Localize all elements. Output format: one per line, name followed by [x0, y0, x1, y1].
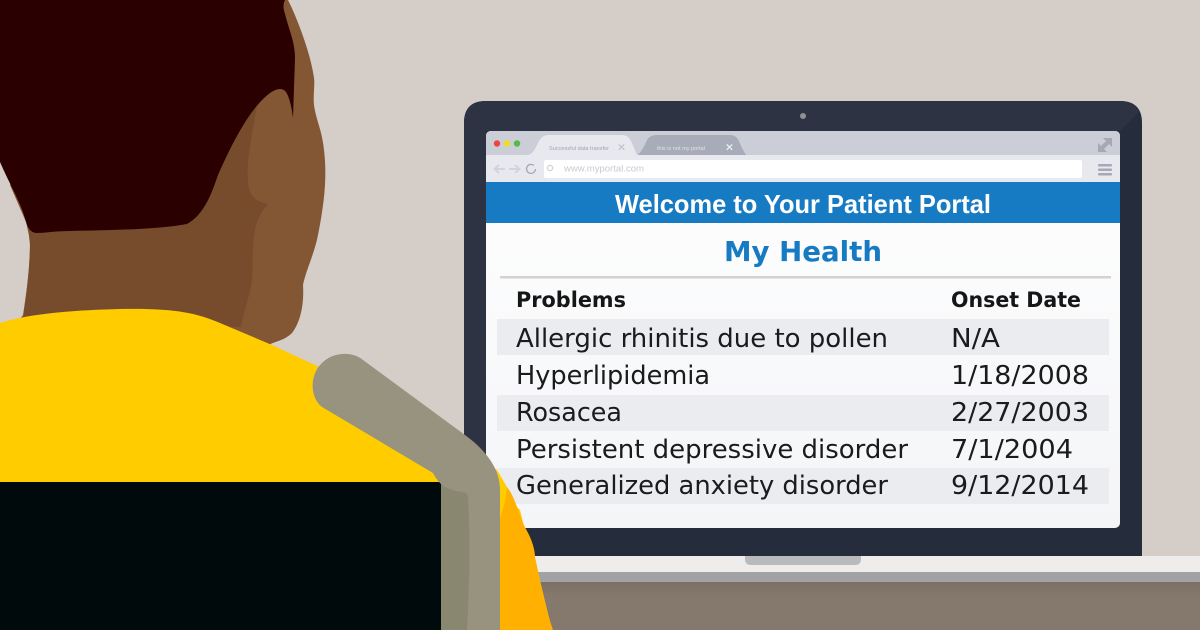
laptop base	[530, 556, 1200, 582]
portal banner	[486, 182, 1120, 223]
chair back	[0, 482, 441, 630]
inactive tab	[638, 135, 746, 155]
chair arm	[313, 354, 500, 630]
shirt	[0, 309, 553, 630]
desk	[530, 582, 1200, 630]
row text: Rosacea	[516, 398, 622, 428]
laptop	[464, 101, 1200, 582]
inactive tab: this is not my portal	[657, 146, 705, 152]
neck shadow	[23, 100, 268, 327]
row text: 7/1/2004	[951, 435, 1073, 465]
portal banner: Welcome to Your Patient Portal	[615, 189, 991, 219]
menu icon	[1098, 164, 1112, 176]
back, forward and reload icons	[494, 164, 536, 173]
row text: N/A	[951, 324, 1000, 354]
problems table	[497, 288, 1109, 504]
person	[0, 0, 553, 630]
window buttons	[494, 140, 520, 147]
screen	[486, 131, 1120, 528]
table header: Problems	[516, 288, 626, 312]
browser tab bar	[486, 131, 1120, 155]
inactive tab: ×	[725, 140, 734, 154]
row stripes	[497, 319, 1109, 504]
row text	[516, 324, 1089, 501]
row text: 9/12/2014	[951, 471, 1089, 501]
url bar: www.myportal.com	[563, 164, 644, 174]
row text: 2/27/2003	[951, 398, 1089, 428]
table header	[516, 288, 1081, 312]
head and neck	[0, 0, 325, 345]
row text: Allergic rhinitis due to pollen	[516, 324, 888, 354]
active tab	[528, 135, 637, 155]
row text: 1/18/2008	[951, 361, 1089, 391]
webcam	[800, 113, 806, 119]
expand icon	[1098, 138, 1112, 152]
url bar	[544, 160, 1082, 178]
row text: Hyperlipidemia	[516, 361, 710, 391]
active tab: ×	[617, 140, 626, 154]
row text: Persistent depressive disorder	[516, 435, 908, 465]
hair	[0, 0, 295, 233]
table header: Onset Date	[951, 288, 1081, 312]
address row	[486, 155, 1120, 182]
active tab: Successful data transfer	[549, 146, 609, 152]
row text: Generalized anxiety disorder	[516, 471, 888, 501]
page heading: My Health	[724, 235, 882, 268]
laptop lid	[464, 101, 1142, 556]
